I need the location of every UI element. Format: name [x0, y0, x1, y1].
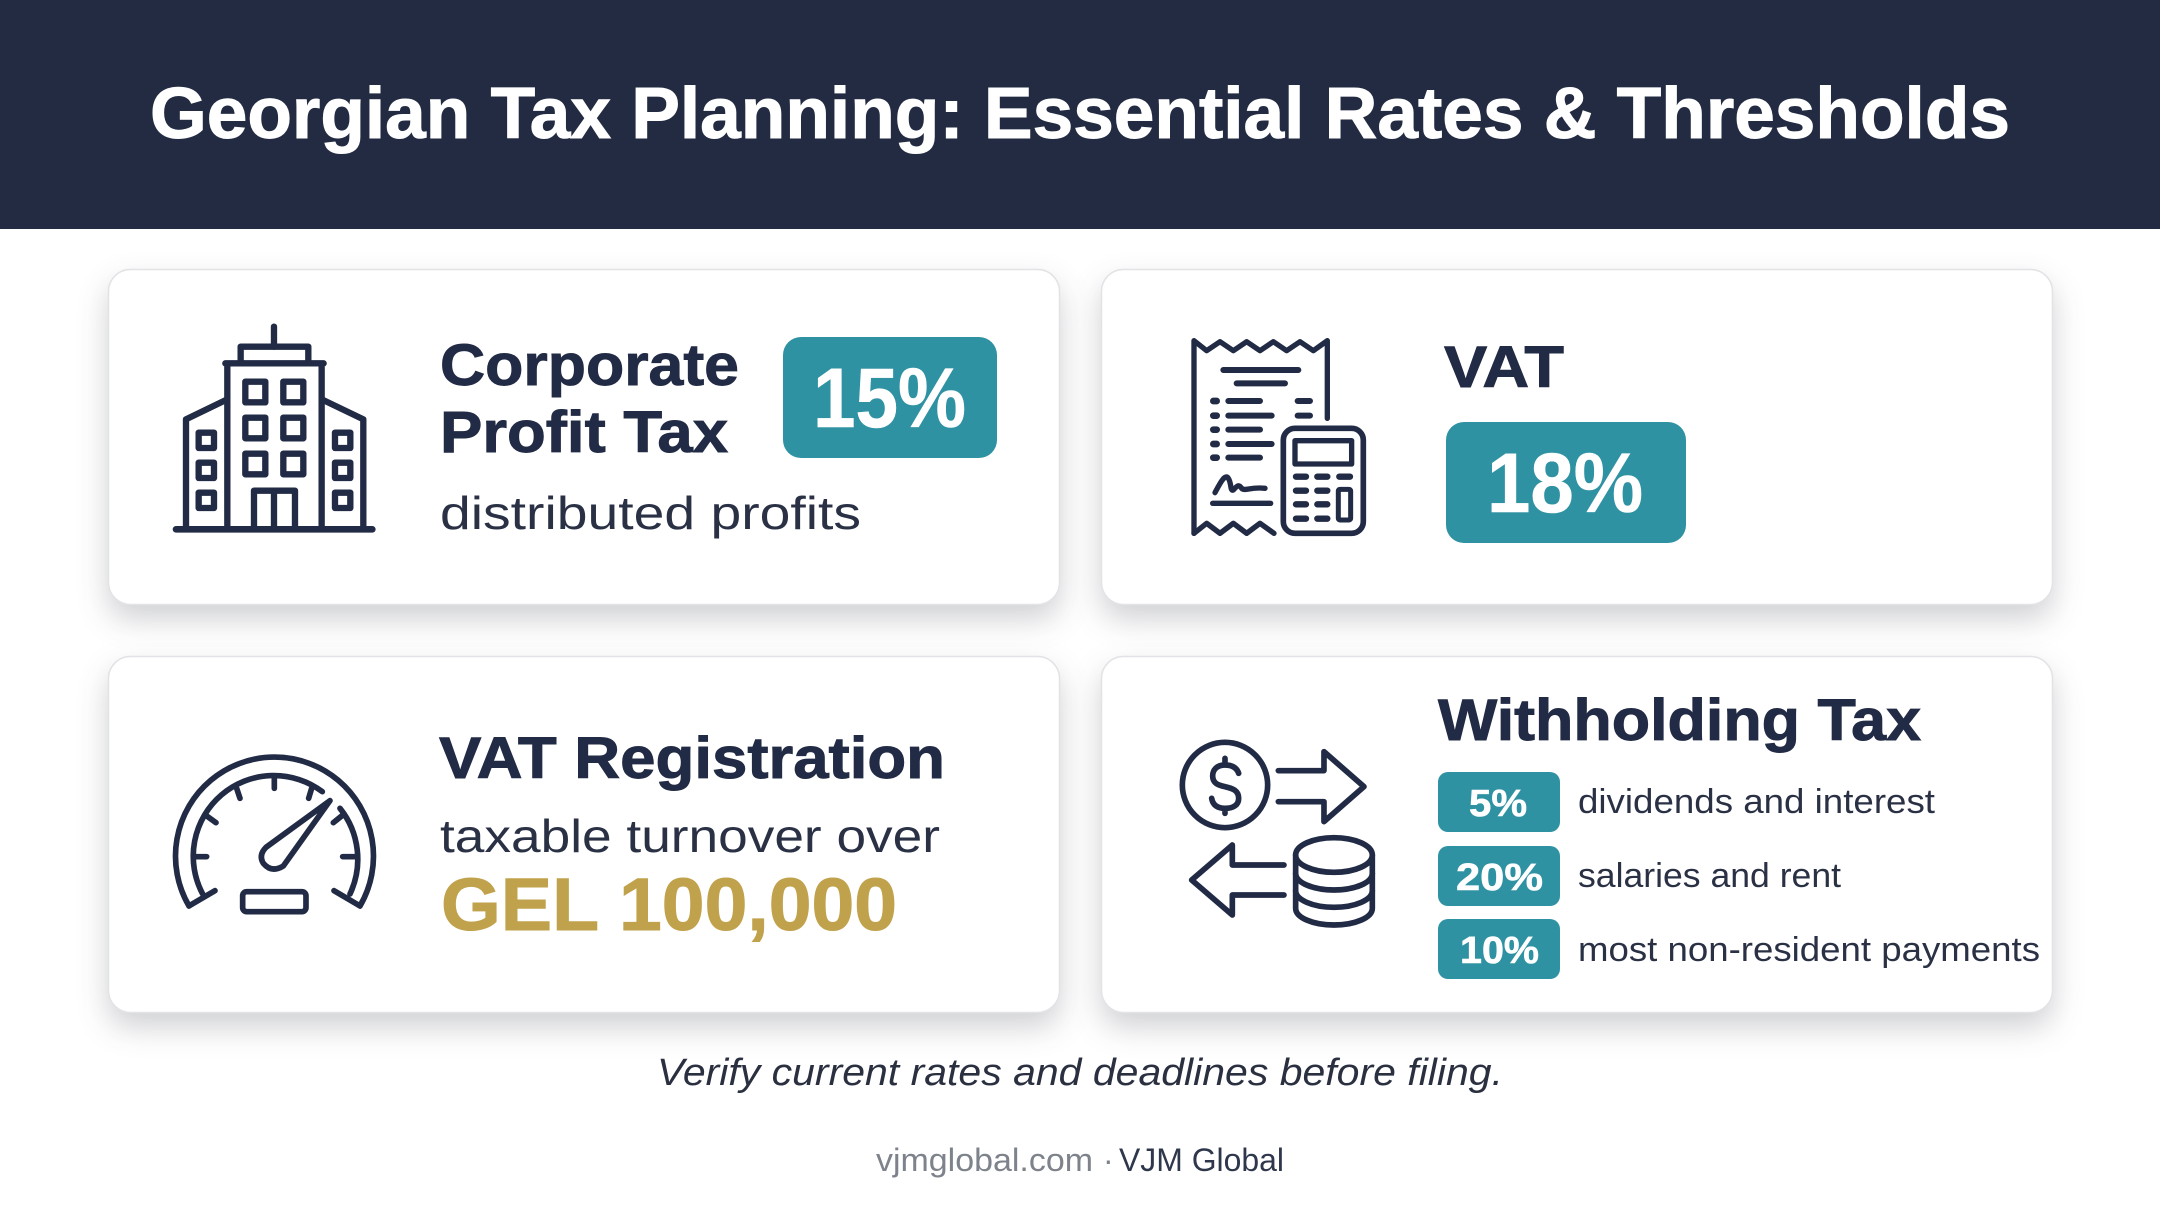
heading: VAT registration: VAT Registration	[439, 726, 945, 791]
text: taxable turnover over: taxable turnover over	[440, 810, 940, 862]
icon: money transfer arrows	[1182, 742, 1372, 925]
icon: receipt and calculator	[1194, 341, 1363, 533]
heading: withholding tax: Withholding Tax	[1438, 688, 1921, 753]
icon: office building	[176, 327, 372, 529]
rate row: 10%: 10%	[1460, 930, 1539, 972]
threshold: GEL 100,000: GEL 100,000	[441, 863, 897, 946]
badge: 18%: 18%	[1487, 436, 1643, 530]
panel: withholding tax	[1102, 656, 2052, 1012]
panel: VAT registration	[108, 656, 1060, 1012]
rate row: 20%	[1438, 846, 1842, 906]
rate row: 20%: salaries and rent	[1578, 857, 1842, 895]
footer: source: VJM Global	[1119, 1142, 1284, 1178]
text: distributed profits: distributed profits	[440, 487, 861, 539]
rate row: 5%: dividends and interest	[1578, 783, 1936, 821]
footer: source: vjmglobal.com	[876, 1142, 1093, 1178]
badge: 15%: 15%	[813, 351, 966, 445]
title: Georgian Tax Planning: Essential Rates & Thresholds	[150, 74, 2010, 154]
panel: VAT	[1102, 270, 2052, 604]
badge: 18%	[1446, 422, 1686, 543]
heading: VAT: VAT	[1444, 335, 1564, 400]
rate row: 20%: 20%	[1456, 857, 1543, 899]
icon: speedometer gauge	[175, 757, 373, 912]
rate row: 5%	[1438, 772, 1936, 832]
footer: source: ·	[1103, 1142, 1114, 1178]
badge: 15%	[783, 337, 997, 458]
rate row: 10%: most non-resident payments	[1578, 931, 2040, 969]
heading: corporate profit tax: Corporate	[440, 333, 739, 398]
heading: corporate profit tax: Profit Tax	[440, 400, 728, 465]
rate row: 5%: 5%	[1469, 783, 1527, 825]
header band	[0, 0, 2160, 229]
note: verify rates: Verify current rates and deadlines before filing.	[657, 1052, 1503, 1094]
rate row: 10%	[1438, 919, 2040, 979]
panel: corporate profit tax	[108, 270, 1060, 604]
